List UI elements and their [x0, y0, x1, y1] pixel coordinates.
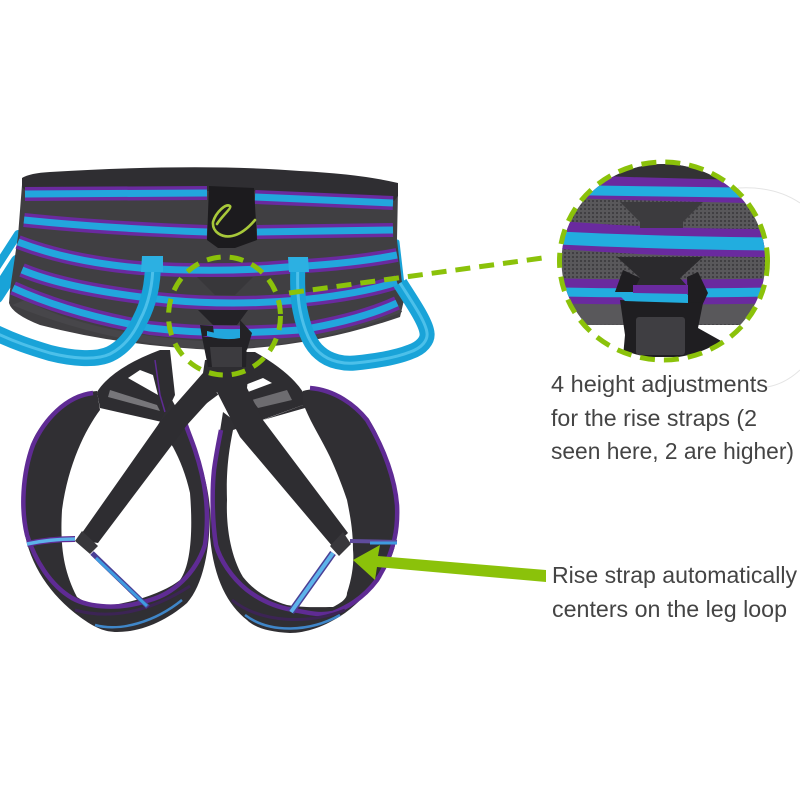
- leg strap connectors: [97, 350, 303, 422]
- gear loop right: [288, 257, 427, 363]
- left leg loop: [22, 391, 210, 632]
- webbing stripes: [13, 193, 397, 333]
- gear loop left: [0, 256, 163, 358]
- faint background arc: [738, 188, 800, 387]
- text: rise strap: centers on the leg loop: [552, 596, 787, 622]
- text: rise strap: [552, 562, 797, 622]
- right leg loop: [210, 388, 398, 633]
- callout circle on belt: [168, 257, 280, 375]
- thin blue rise straps: [27, 539, 397, 612]
- text: height adjustments: [551, 371, 794, 464]
- waist belt: [9, 167, 404, 350]
- text: height adjustments: seen here, 2 are higher): [551, 438, 794, 464]
- dashed connector line: [289, 257, 550, 293]
- gear loop stubs: [0, 234, 402, 296]
- icon: e logo: [213, 205, 255, 236]
- harness infographic: [0, 160, 800, 633]
- arrow: [353, 545, 546, 582]
- text: height adjustments: for the rise straps (2: [551, 405, 757, 431]
- logo patch: [207, 186, 257, 248]
- text: height adjustments: 4 height adjustments: [551, 371, 768, 397]
- magnified callout ring: [560, 162, 768, 360]
- central buckle on belt: [197, 277, 253, 367]
- crossing rise straps: [75, 360, 351, 556]
- text: rise strap: Rise strap automatically: [552, 562, 797, 588]
- magnified detail: [562, 164, 765, 357]
